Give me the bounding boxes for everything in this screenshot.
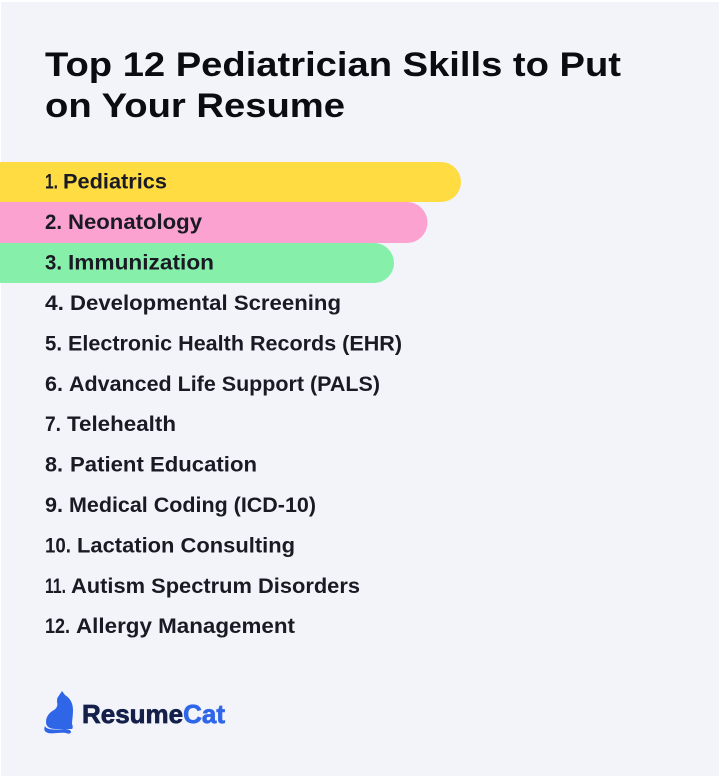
skills list: 3. <box>45 250 62 274</box>
skills list: 4. <box>45 291 64 315</box>
skills list: 12. <box>45 614 70 638</box>
title <box>45 46 622 125</box>
skills list: Autism Spectrum Disorders <box>71 574 360 598</box>
skills list: Allergy Management <box>76 614 295 638</box>
skills list: Lactation Consulting <box>77 534 295 558</box>
skills list: Telehealth <box>67 412 176 436</box>
title: Top 12 Pediatrician Skills to Put <box>45 46 622 84</box>
skills list: 2. <box>45 210 62 234</box>
skills list: Neonatology <box>68 210 202 234</box>
skills list: 11. <box>45 574 66 598</box>
skills list: 6. <box>45 372 63 396</box>
icon: blue cat <box>44 691 73 734</box>
skills list: 10. <box>45 534 71 558</box>
bar: rank 1 highlight <box>0 162 461 202</box>
skills list: Pediatrics <box>63 170 167 194</box>
skills list: Patient Education <box>70 452 257 476</box>
bar: rank 2 highlight <box>0 202 428 243</box>
skills list: Electronic Health Records (EHR) <box>68 332 402 356</box>
skills list: 5. <box>45 332 62 356</box>
bar: rank 3 highlight <box>0 243 394 283</box>
skills list: Immunization <box>68 250 214 274</box>
skills list <box>45 170 402 638</box>
skills list: 7. <box>45 412 61 436</box>
logo: ResumeCat <box>44 691 225 734</box>
wordmark: ResumeCat <box>82 699 225 729</box>
skills list: Advanced Life Support (PALS) <box>69 372 380 396</box>
skills list: 9. <box>45 493 63 517</box>
skills list: 8. <box>45 452 63 476</box>
skills list: 1. <box>45 170 58 194</box>
title: on Your Resume <box>45 87 345 125</box>
skills list: Developmental Screening <box>70 291 341 315</box>
skills list: Medical Coding (ICD-10) <box>69 493 316 517</box>
